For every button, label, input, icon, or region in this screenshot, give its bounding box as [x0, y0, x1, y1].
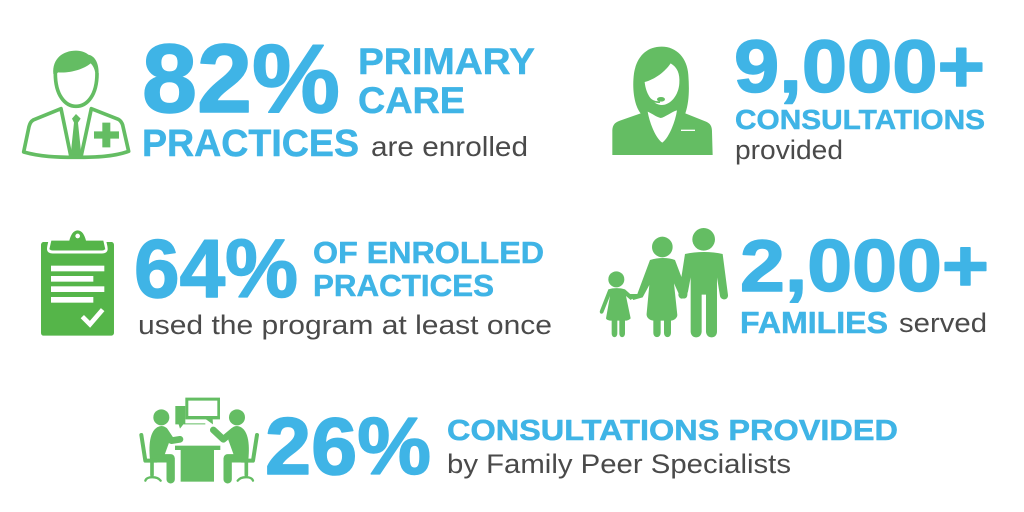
label: of enrolled: OF ENROLLED — [313, 235, 544, 270]
label: families: FAMILIES — [740, 305, 888, 340]
icon: family — [600, 228, 728, 337]
panel: consultations — [612, 25, 985, 165]
text: served: served — [899, 308, 987, 338]
stat: 2,000+: 2,000+ — [740, 226, 989, 307]
panel: enrolled practices — [41, 222, 552, 340]
label: consultations: CONSULTATIONS — [735, 104, 985, 135]
icon: doctor — [24, 51, 129, 157]
panel: primary care practices — [24, 24, 535, 165]
panel: family peer specialists — [141, 398, 898, 492]
text: by family peer specialists: by Family Peer Specialists — [447, 449, 791, 479]
text: used the program: used the program at least once — [138, 310, 552, 340]
text: are enrolled: are enrolled — [371, 131, 528, 162]
icon: clipboard — [41, 230, 114, 336]
stat: 26%: 26% — [265, 402, 431, 492]
icon: meeting — [141, 398, 257, 482]
label: care: CARE — [358, 80, 465, 121]
label: primary: PRIMARY — [358, 41, 535, 82]
icon: call agent with headset — [612, 47, 713, 155]
panel: families — [600, 226, 989, 340]
stat: 82%: 82% — [142, 24, 340, 133]
stat: 64%: 64% — [134, 222, 298, 315]
label: consultations provided: CONSULTATIONS PROVIDED — [447, 415, 898, 447]
stat: 9,000+: 9,000+ — [734, 25, 985, 108]
text: provided: provided — [735, 135, 843, 165]
label: practices: PRACTICES — [142, 123, 359, 165]
figure: right person — [213, 409, 257, 481]
label: practices: PRACTICES — [313, 268, 494, 303]
figure: left person — [141, 409, 180, 481]
